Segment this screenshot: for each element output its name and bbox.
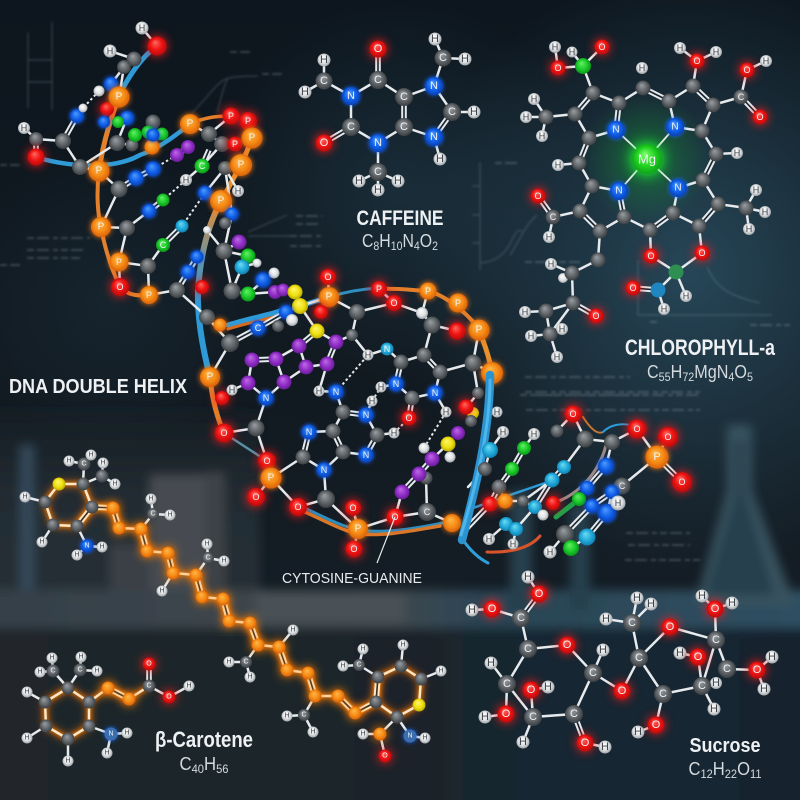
chlorophyll-a molecule: O	[629, 283, 637, 293]
magnesium green glow	[582, 94, 712, 224]
chlorophyll-a molecule: N	[671, 122, 679, 132]
caffeine molecule: O	[320, 137, 329, 149]
DNA atoms: O	[324, 272, 332, 282]
DNA atoms: O	[350, 544, 358, 554]
sucrose molecule: H	[712, 677, 720, 689]
beta-carotene chain molecule: H	[159, 588, 165, 594]
caffeine label: N	[402, 231, 414, 251]
beta-carotene fragment molecule: H	[49, 654, 55, 662]
beta-carotene chain molecule: H	[226, 658, 232, 666]
caffeine molecule: H	[461, 53, 469, 65]
beta-carotene fragment molecule: C	[77, 666, 83, 674]
DNA atoms: C	[255, 323, 262, 333]
beta-carotene chain molecule: H	[167, 512, 173, 518]
sucrose molecule: H	[634, 726, 642, 738]
caffeine molecule: N	[374, 137, 382, 149]
sucrose molecule: H	[728, 597, 736, 609]
DNA atoms: C	[160, 240, 167, 250]
DNA atoms: H	[365, 350, 371, 360]
DNA atoms: N	[306, 427, 312, 437]
beta-carotene chain molecule: H	[422, 734, 428, 742]
sucrose molecule: O	[652, 719, 661, 731]
DNA double helix	[18, 22, 692, 558]
right DNA atoms: H	[531, 429, 537, 439]
chlorophyll-a molecule: H	[677, 43, 683, 53]
sucrose molecule: H	[602, 613, 610, 625]
sucrose label: C	[688, 759, 702, 779]
DNA atoms: N	[432, 388, 438, 398]
chlorophyll-a molecule: H	[523, 112, 529, 122]
caffeine molecule: H	[320, 54, 328, 66]
beta-carotene fragment molecule: H	[94, 668, 100, 674]
chlorophyll-a molecule: H	[734, 148, 740, 158]
sucrose molecule: H	[601, 741, 609, 753]
beta-carotene fragment molecule: N	[108, 730, 114, 738]
right DNA atoms: H	[615, 498, 621, 508]
right DNA atoms: O	[678, 477, 686, 487]
sucrose molecule: C	[723, 663, 731, 675]
DNA atoms: H	[139, 23, 145, 33]
DNA atoms: H	[391, 428, 397, 438]
beta-carotene fragment molecule: H	[78, 654, 84, 660]
chlorophyll-a molecule: H	[661, 304, 667, 314]
right DNA atoms: H	[510, 539, 516, 549]
sucrose molecule: C	[589, 667, 597, 679]
DNA atoms: P	[187, 118, 194, 130]
beta-carotene chain molecule: H	[39, 538, 45, 546]
DNA atoms: O	[294, 502, 302, 512]
caffeine molecule: H	[470, 106, 478, 118]
sucrose molecule: O	[502, 708, 511, 720]
beta-carotene chain molecule: H	[88, 452, 94, 458]
chlorophyll-a molecule: H	[546, 232, 552, 242]
DNA atoms: P	[232, 139, 238, 149]
caffeine label: O	[420, 231, 432, 251]
chlorophyll-a label: 4	[728, 370, 735, 384]
beta-carotene chain molecule: H	[112, 480, 118, 488]
beta-carotene chain molecule: C	[150, 510, 156, 518]
beta-carotene fragment molecule: O	[166, 694, 172, 700]
DNA atoms: C	[199, 161, 206, 171]
caffeine molecule: C	[448, 106, 456, 118]
chlorophyll-a label: H	[671, 362, 682, 382]
DNA atoms: P	[238, 160, 245, 170]
sucrose label: 22	[725, 767, 737, 781]
chlorophyll-a molecule: H	[683, 291, 689, 301]
DNA atoms: H	[494, 407, 500, 417]
sucrose molecule: C	[503, 678, 511, 690]
DNA atoms: H	[443, 407, 449, 417]
chlorophyll-a molecule: O	[743, 65, 751, 75]
beta-carotene chain molecule: C	[301, 712, 307, 718]
sucrose molecule: H	[676, 647, 684, 659]
chlorophyll-a molecule: O	[756, 112, 764, 122]
chlorophyll-a label: 55	[659, 370, 671, 384]
sucrose label	[688, 735, 762, 781]
DNA ribbons	[36, 46, 630, 563]
beta-carotene chain molecule: H	[221, 558, 227, 564]
beta-carotene fragment molecule: H	[24, 734, 30, 742]
beta-carotene label: H	[204, 754, 216, 774]
sucrose molecule: C	[659, 688, 667, 700]
sucrose label: Sucrose	[690, 735, 760, 757]
chlorophyll-a molecule: H	[639, 63, 645, 73]
beta-carotene chain molecule: H	[438, 668, 444, 674]
DNA atoms: P	[476, 324, 483, 336]
caffeine molecule: H	[301, 86, 309, 98]
sucrose molecule: H	[710, 703, 718, 715]
chlorophyll-a molecule: O	[592, 311, 600, 321]
sucrose molecule: C	[628, 617, 636, 629]
beta-carotene chain molecule: C	[356, 662, 362, 668]
beta-carotene chain molecule: C	[243, 658, 249, 666]
DNA atoms: O	[116, 282, 124, 292]
chlorophyll-a label: 5	[747, 370, 753, 384]
sucrose molecule: O	[618, 685, 627, 697]
sucrose molecule: O	[711, 603, 720, 615]
DNA atoms	[18, 22, 503, 558]
right DNA atoms: H	[486, 534, 492, 544]
DNA atoms: H	[235, 186, 241, 196]
chlorophyll-a molecule: H	[548, 259, 554, 269]
chlorophyll-a molecule: H	[555, 160, 561, 170]
chlorophyll-a molecule: O	[693, 56, 701, 66]
sucrose molecule: H	[487, 657, 495, 669]
DNA atoms: H	[107, 46, 113, 56]
chlorophyll-a molecule: C	[738, 92, 745, 102]
caffeine molecule: C	[374, 166, 382, 178]
sucrose molecule: H	[544, 681, 552, 693]
main blue ribbon	[461, 375, 490, 540]
caffeine label: 4	[414, 239, 420, 253]
right DNA atoms: H	[500, 427, 506, 437]
cytosine-guanine callout: CYTOSINE-GUANINE	[282, 570, 422, 587]
right DNA atoms	[478, 406, 692, 558]
caffeine label: 8	[373, 239, 380, 253]
chlorophyll-a molecule: H	[531, 94, 537, 104]
DNA atoms: P	[116, 257, 122, 267]
caffeine molecule: O	[374, 43, 383, 55]
DNA atoms: P	[249, 132, 256, 144]
DNA atoms: N	[363, 410, 369, 420]
sucrose label: H	[713, 759, 725, 779]
beta-carotene chain molecule: H	[310, 728, 316, 736]
beta-carotene chain molecule	[20, 450, 446, 762]
sucrose molecule: O	[535, 588, 544, 600]
sucrose molecule	[466, 570, 778, 754]
chlorophyll-a molecule: H	[522, 307, 528, 317]
chlorophyll-a molecule: H	[554, 352, 560, 362]
right DNA atoms: C	[619, 481, 626, 491]
caffeine molecule: C	[400, 91, 408, 103]
DNA atoms: O	[263, 456, 271, 466]
DNA atoms: H	[183, 175, 189, 185]
sucrose molecule: C	[524, 643, 532, 655]
beta-carotene chain molecule: H	[360, 646, 366, 652]
beta-carotene fragment molecule: H	[24, 688, 30, 696]
DNA atoms: O	[405, 413, 413, 423]
DNA atoms: P	[96, 166, 103, 176]
sucrose label: O	[737, 759, 750, 779]
caffeine molecule: H	[355, 175, 363, 187]
DNA atoms: N	[363, 450, 369, 460]
sucrose molecule: C	[517, 612, 525, 624]
beta-carotene chain molecule: O	[382, 752, 388, 760]
beta-carotene chain molecule: C	[81, 460, 87, 468]
beta-carotene fragment molecule: O	[146, 660, 152, 668]
chlorophyll-a molecule: H	[528, 331, 534, 341]
DNA atoms: H	[21, 123, 27, 133]
DNA atoms: H	[316, 386, 322, 396]
beta-carotene chain molecule: H	[22, 494, 28, 500]
caffeine molecule: C	[320, 75, 328, 87]
cytosine-guanine callout	[282, 517, 422, 587]
chlorophyll-a label	[625, 335, 776, 384]
sucrose molecule: H	[481, 711, 489, 723]
chlorophyll-a label: MgN	[694, 362, 728, 382]
sucrose molecule: C	[712, 634, 720, 646]
sucrose molecule: H	[524, 571, 532, 583]
caffeine molecule: H	[374, 184, 382, 196]
beta-carotene label: 40	[192, 762, 204, 776]
caffeine label: H	[379, 231, 391, 251]
beta-carotene chain molecule: H	[148, 496, 154, 502]
sucrose molecule: O	[563, 639, 572, 651]
right DNA atoms: O	[664, 432, 672, 442]
DNA atoms: P	[245, 116, 251, 126]
sucrose molecule: O	[694, 651, 703, 663]
DNA atoms: P	[228, 111, 234, 121]
magnesium atom: Mg	[638, 152, 656, 166]
DNA atoms: N	[321, 465, 327, 475]
DNA bonds	[24, 28, 682, 552]
chlorophyll-a molecule: H	[763, 56, 769, 66]
caffeine label: C	[362, 231, 375, 251]
chlorophyll-a molecule: O	[647, 251, 655, 261]
sucrose molecule: H	[599, 644, 607, 656]
caffeine molecule: C	[400, 121, 408, 133]
sucrose molecule: C	[529, 711, 537, 723]
DNA atoms: N	[333, 387, 339, 397]
DNA atoms: P	[218, 196, 225, 206]
DNA atoms: O	[349, 503, 357, 513]
DNA atoms: O	[252, 492, 260, 502]
beta-carotene chain molecule: H	[360, 730, 366, 738]
sucrose molecule: H	[519, 736, 527, 748]
chlorophyll-a molecule: O	[598, 42, 606, 52]
sucrose molecule: O	[666, 621, 675, 633]
beta-carotene chain molecule: H	[290, 626, 296, 634]
DNA atoms: P	[116, 92, 123, 102]
chlorophyll-a molecule: H	[746, 224, 752, 234]
sucrose molecule: H	[647, 598, 655, 610]
beta-carotene fragment molecule: H	[37, 668, 43, 676]
sucrose molecule: H	[468, 604, 476, 616]
caffeine label: 10	[391, 239, 403, 253]
DNA atoms: O	[220, 428, 228, 438]
DNA atoms: O	[391, 512, 399, 522]
beta-carotene fragment molecule: H	[104, 750, 110, 756]
DNA atoms: P	[326, 292, 333, 302]
caffeine label: 2	[432, 239, 438, 253]
caffeine molecule: C	[439, 52, 447, 64]
beta-carotene chain molecule: H	[100, 460, 106, 466]
DNA atoms: P	[355, 524, 362, 534]
chlorophyll-a molecule: H	[552, 42, 558, 52]
caffeine molecule: N	[347, 90, 355, 102]
chlorophyll-a molecule: N	[674, 182, 682, 194]
DNA atoms: N	[384, 344, 390, 354]
chlorophyll-a molecule	[519, 40, 772, 363]
sucrose molecule: H	[768, 651, 776, 663]
caffeine molecule: N	[430, 131, 438, 143]
sucrose molecule: O	[753, 664, 762, 676]
beta-carotene chain molecule: C	[205, 554, 211, 562]
caffeine molecule: C	[347, 121, 355, 133]
chlorophyll-a label: 72	[682, 370, 695, 384]
DNA atoms: H	[229, 385, 235, 395]
chlorophyll-a molecule: H	[539, 131, 545, 141]
chlorophyll-a molecule: O	[554, 63, 562, 73]
sucrose label: 12	[700, 767, 713, 781]
DNA atoms: O	[390, 298, 398, 308]
beta-carotene chain molecule: H	[400, 642, 406, 648]
beta-carotene label: C	[180, 754, 192, 774]
DNA double helix label: DNA DOUBLE HELIX	[9, 376, 188, 398]
caffeine label: CAFFEINE	[356, 207, 444, 230]
sucrose molecule: C	[570, 708, 578, 720]
chlorophyll-a molecule: N	[615, 186, 623, 196]
sucrose molecule: H	[698, 590, 706, 602]
chlorophyll-a molecule: O	[534, 191, 542, 201]
beta-carotene chain molecule: N	[84, 542, 90, 550]
caffeine molecule: C	[374, 74, 382, 86]
DNA atoms: N	[393, 379, 399, 389]
sucrose molecule: H	[633, 592, 641, 604]
beta-carotene chain molecule: H	[74, 552, 80, 558]
chlorophyll-a molecule: H	[713, 47, 719, 57]
chlorophyll-a molecule: N	[612, 124, 620, 136]
sucrose molecule: C	[635, 652, 643, 664]
beta-carotene chain molecule: H	[66, 458, 72, 464]
beta-carotene chain molecule: N	[407, 732, 413, 740]
sucrose molecule: O	[527, 684, 536, 696]
beta-carotene label: 56	[216, 762, 229, 776]
caffeine label	[356, 207, 444, 253]
right DNA atoms: P	[653, 451, 661, 463]
beta-carotene chain molecule: H	[284, 712, 290, 720]
beta-carotene fragment molecule: H	[65, 758, 71, 764]
DNA atoms: P	[268, 472, 275, 484]
right DNA atoms: O	[569, 409, 577, 419]
caffeine molecule: H	[394, 175, 402, 187]
beta-carotene chain molecule: H	[204, 540, 210, 548]
beta-carotene label	[155, 727, 253, 776]
caffeine molecule	[298, 32, 480, 196]
beta-carotene fragment molecule: H	[124, 730, 130, 736]
DNA atoms: H	[369, 396, 375, 406]
chlorophyll-a molecule: C	[550, 212, 557, 222]
chlorophyll-a molecule: H	[753, 185, 759, 195]
sucrose molecule: H	[760, 683, 768, 695]
DNA atoms: C	[424, 507, 431, 517]
DNA atoms: P	[376, 284, 382, 294]
chlorophyll-a label: O	[734, 362, 747, 382]
DNA atoms: H	[378, 382, 384, 392]
right DNA atoms: O	[633, 424, 641, 434]
caffeine molecule: H	[436, 153, 444, 165]
chlorophyll-a label: C	[647, 362, 660, 382]
chlorophyll-a molecule: O	[698, 248, 706, 258]
DNA atoms: P	[146, 290, 152, 300]
beta-carotene chain molecule: H	[247, 674, 253, 680]
DNA atoms: P	[207, 372, 214, 382]
DNA atoms: N	[263, 393, 269, 403]
beta-carotene label: β-Carotene	[155, 727, 253, 752]
sucrose molecule: C	[698, 680, 706, 692]
DNA atoms: P	[425, 286, 431, 296]
chlorophyll-a molecule: H	[569, 47, 575, 57]
magnesium atom	[632, 144, 662, 174]
faint chalkboard equations and charts	[0, 22, 790, 560]
chlorophyll-a molecule: H	[762, 207, 768, 217]
beta-carotene fragment molecule	[22, 652, 194, 766]
DNA atoms: P	[455, 298, 461, 308]
sucrose molecule: O	[488, 603, 497, 615]
caffeine molecule: H	[431, 33, 439, 45]
right DNA atoms: H	[547, 547, 553, 557]
sucrose label: 11	[750, 767, 762, 781]
sucrose molecule: O	[581, 737, 590, 749]
chlorophyll-a molecule: H	[559, 324, 565, 334]
beta-carotene fragment molecule: C	[146, 682, 152, 690]
beta-carotene fragment molecule: H	[186, 682, 192, 690]
beta-carotene chain molecule: H	[340, 662, 346, 670]
beta-carotene fragment molecule: C	[50, 668, 56, 674]
caffeine molecule: N	[430, 80, 438, 92]
beta-carotene chain molecule: H	[99, 544, 105, 550]
DNA atoms: P	[98, 222, 105, 232]
